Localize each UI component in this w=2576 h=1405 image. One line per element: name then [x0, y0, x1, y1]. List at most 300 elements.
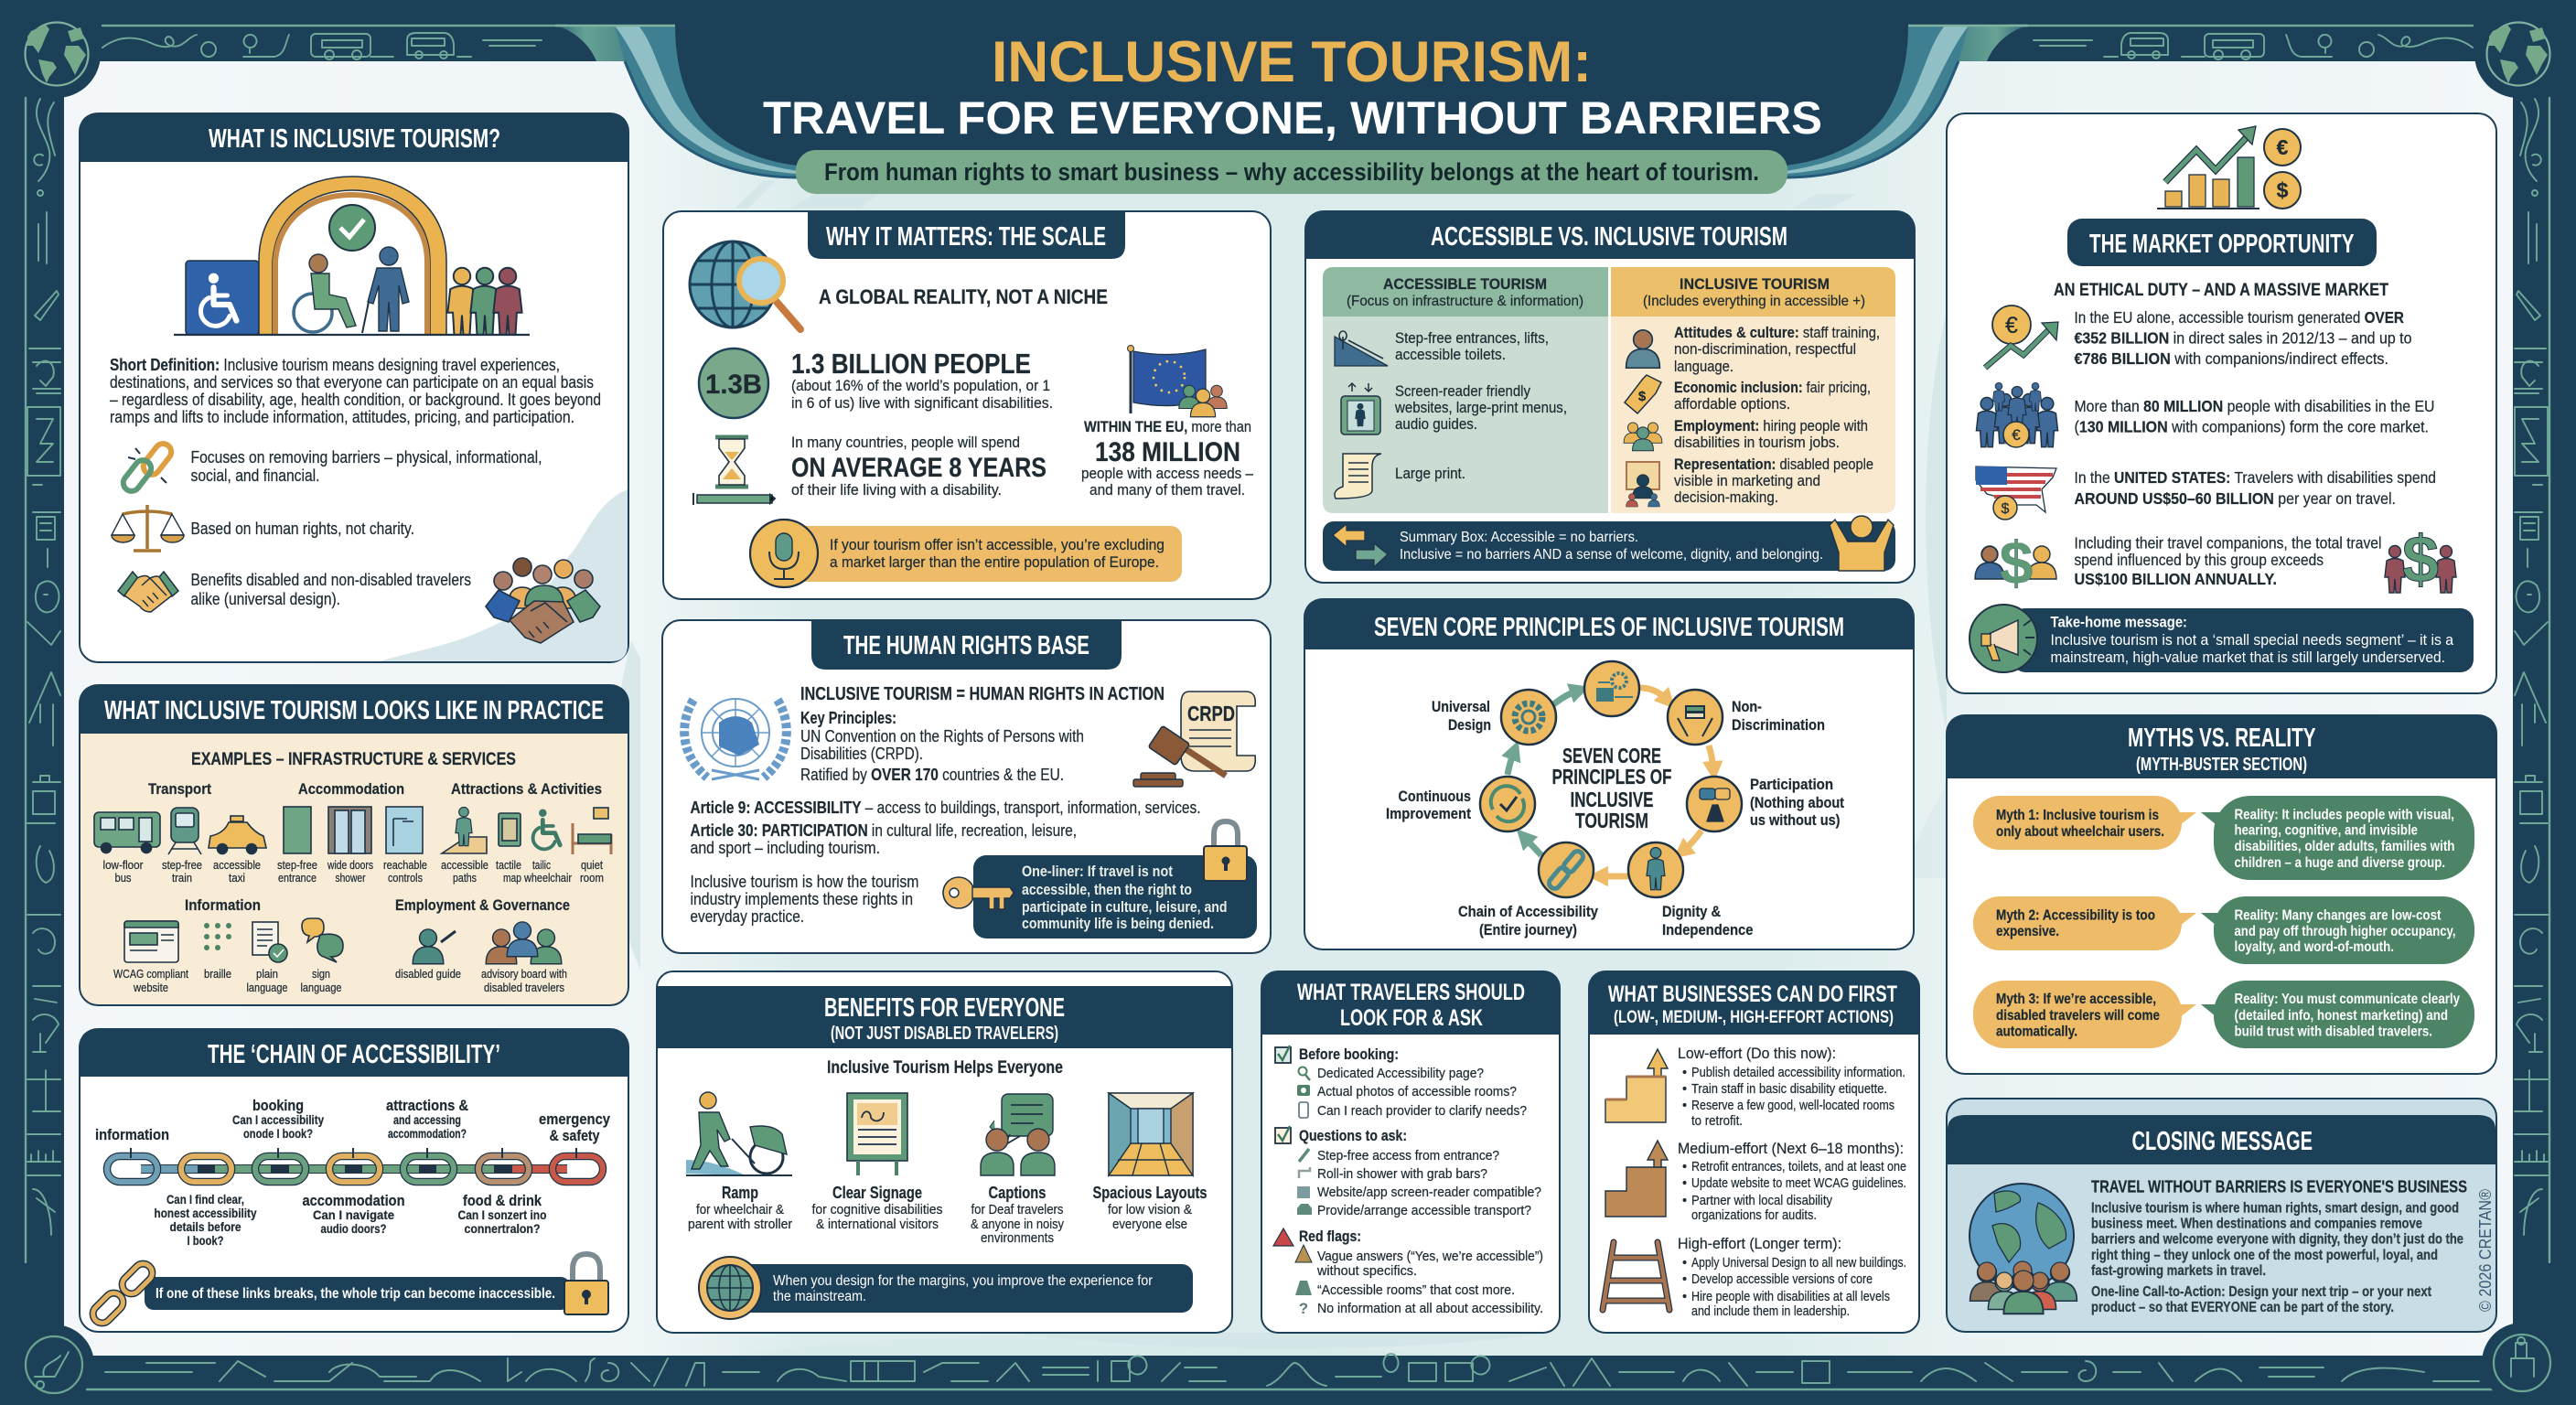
closing text: business meet. When destinations and companies remove [2091, 1217, 2422, 1231]
icon: chain [1547, 849, 1585, 891]
benefit labels: for cognitive disabilities [812, 1202, 942, 1217]
panel: accessible vs inclusive [1305, 211, 1915, 583]
icon: scales of justice [112, 505, 184, 551]
panel: looks like in practice [80, 685, 628, 1005]
column: inclusive tourism: (Includes everything in accessible +) [1643, 294, 1865, 309]
point: universal design: alike (universal design). [190, 590, 340, 608]
callout: excluded market [750, 520, 1182, 587]
panel heading tab: THE HUMAN RIGHTS BASE [843, 631, 1089, 660]
articles [690, 799, 1200, 857]
column: inclusive tourism: language. [1674, 358, 1733, 375]
point: removing barriers: Focuses on removing barriers – physical, informational, [190, 448, 542, 467]
chain labels above: accommodation? [388, 1126, 467, 1141]
checklist: questions to ask: Step-free access from entrance? [1317, 1148, 1499, 1164]
subheading: Inclusive Tourism Helps Everyone [827, 1058, 1063, 1078]
callout: design for margins: the mainstream. [773, 1289, 866, 1304]
checklist: red flags: ? [1299, 1300, 1308, 1317]
information and employment labels: sign [312, 968, 330, 981]
background swooshes [610, 180, 1947, 1356]
short definition [110, 356, 601, 426]
principle labels [1386, 698, 1844, 938]
icons: information [124, 918, 343, 962]
corner medallion: top right globe [2474, 10, 2562, 98]
myth bubbles [1973, 796, 2196, 1048]
chain labels above: onode I book? [243, 1126, 313, 1141]
principle labels: Universal [1432, 698, 1490, 715]
reality text: Reality: Many changes are low-cost [2234, 907, 2441, 924]
center label: SEVEN CORE [1562, 744, 1661, 767]
callout: excluded market: a market larger than the entire population of Europe. [830, 553, 1159, 571]
center label: TOURISM [1575, 809, 1648, 832]
key principles: Ratified by OVER 170 countries & the EU. [800, 766, 1064, 784]
short definition: Short Definition: Inclusive tourism means designing travel experiences, [110, 356, 560, 374]
benefit labels [688, 1184, 1208, 1246]
principle labels: Discrimination [1732, 716, 1825, 734]
reality text: and pay off through higher occupancy, [2234, 924, 2455, 939]
checklist: red flags: Red flags: [1299, 1228, 1361, 1245]
icon: ladder [1603, 1242, 1669, 1310]
panel heading [1948, 1115, 2496, 1164]
chain labels above: emergency [539, 1110, 610, 1128]
column: inclusive tourism: non-discrimination, respectful [1674, 340, 1856, 358]
transport and accommodation labels: controls [388, 872, 423, 885]
benefit labels: parent with stroller [688, 1217, 792, 1232]
myth text: Myth 2: Accessibility is too [1996, 907, 2155, 924]
icon: USA flag map [1976, 467, 2056, 520]
transport and accommodation labels: train [172, 872, 192, 885]
point: removing barriers [190, 448, 542, 485]
transport and accommodation labels: tactile [496, 859, 521, 872]
stat: eight years [791, 434, 1046, 499]
panel heading: WHAT BUSINESSES CAN DO FIRST [1608, 981, 1897, 1007]
reality text: Reality: It includes people with visual, [2234, 807, 2454, 823]
point: removing barriers: social, and financial. [190, 467, 320, 485]
stat: 138 million: and many of them travel. [1089, 481, 1245, 499]
transport and accommodation labels: shower [335, 872, 366, 885]
panel heading [1261, 971, 1560, 1035]
column: inclusive tourism [1611, 267, 1895, 513]
checklist: before booking: Dedicated Accessibility page? [1317, 1066, 1484, 1081]
closing text: TRAVEL WITHOUT BARRIERS IS EVERYONE'S BUSINESS [2091, 1178, 2467, 1196]
transport and accommodation labels: paths [453, 872, 477, 885]
arrows between principles [1508, 688, 1713, 876]
panel heading: LOOK FOR & ASK [1340, 1005, 1483, 1031]
stat: United States: In the UNITED STATES: Travelers with disabilities spend [2075, 468, 2436, 487]
reality bubbles [2201, 796, 2474, 1048]
low-effort actions: • [1682, 1082, 1687, 1097]
checklist: before booking [1275, 1046, 1527, 1119]
myth text: automatically. [1996, 1024, 2077, 1039]
title: TRAVEL FOR EVERYONE, WITHOUT BARRIERS [763, 92, 1822, 144]
panel heading tab [808, 211, 1125, 259]
chain labels above [95, 1097, 610, 1144]
chain labels below: Can I find clear, [166, 1192, 244, 1207]
stat: 138 million [1081, 418, 1253, 499]
column: inclusive tourism: Employment: hiring people with [1674, 417, 1868, 434]
icon: crowd with coin [1976, 382, 2058, 447]
stat: eight years: In many countries, people will spend [791, 434, 1020, 451]
reality text: disabilities, older adults, families with [2234, 839, 2455, 854]
callout: one-liner: One-liner: If travel is not [1022, 863, 1173, 880]
information and employment labels: braille [204, 968, 231, 981]
panel heading: CLOSING MESSAGE [2131, 1127, 2313, 1156]
icon: dollar with two people: $ [2402, 523, 2439, 596]
corner medallion: bottom left [14, 1325, 94, 1405]
icon: price tag: $ [1638, 389, 1647, 404]
icon: CRPD scroll and gavel [1133, 692, 1255, 787]
chain labels above: Can I accessibility [232, 1112, 324, 1127]
checklist: questions to ask: Questions to ask: [1299, 1127, 1407, 1144]
transport and accommodation labels: entrance [278, 872, 317, 885]
callout: one-liner: participate in culture, leisure, and [1022, 898, 1228, 916]
icons: transport [94, 808, 266, 854]
column: inclusive tourism: INCLUSIVE TOURISM [1680, 275, 1830, 293]
icon: employees [1624, 423, 1662, 451]
icon: speech bubbles [1700, 788, 1730, 821]
point: universal design: Benefits disabled and non-disabled travelers [190, 571, 471, 589]
transport and accommodation labels: step-free [277, 859, 317, 872]
icon: key [943, 877, 1014, 909]
benefit labels: Ramp [722, 1184, 758, 1202]
chain labels above: and accessing [393, 1112, 461, 1127]
category headings row two: Employment & Governance [395, 896, 570, 914]
principle labels: Chain of Accessibility [1458, 903, 1598, 920]
column: accessible tourism: ACCESSIBLE TOURISM [1383, 275, 1547, 293]
stat: travel companions: US$100 BILLION ANNUALLY. [2075, 570, 2277, 588]
stat: EU sales: In the EU alone, accessible tourism generated OVER [2075, 308, 2404, 327]
summary box [1323, 516, 1895, 571]
stat: 1.3 billion: in 6 of us) live with significant disabilities. [791, 394, 1053, 412]
high-effort actions: High-effort (Longer term): [1678, 1235, 1841, 1252]
checklist: questions to ask [1275, 1126, 1541, 1218]
callout: take-home message: Inclusive tourism is not a ‘small special needs segment’ – it is a [2051, 632, 2454, 649]
principle labels: Participation [1750, 776, 1833, 793]
chain labels below: Can I navigate [313, 1207, 394, 1222]
benefit labels: & international visitors [816, 1217, 939, 1232]
short definition: destinations, and services so that everyone can participate on an equal basis [110, 373, 594, 391]
chain labels above: booking [252, 1097, 304, 1114]
icon: staff member [1626, 330, 1659, 368]
checklist: before booking: Can I reach provider to clarify needs? [1317, 1103, 1527, 1119]
callout: take-home message: mainstream, high-value market that is still largely underserved. [2051, 649, 2445, 666]
icon: 1.3B badge: 1.3B [705, 370, 762, 400]
panel heading: (LOW-, MEDIUM-, HIGH-EFFORT ACTIONS) [1614, 1008, 1894, 1027]
chain labels below: details before [170, 1219, 242, 1234]
principle labels: Design [1448, 716, 1491, 734]
panel heading: WHAT IS INCLUSIVE TOURISM? [209, 124, 500, 154]
transport and accommodation labels: step-free [162, 859, 202, 872]
panel: why it matters [663, 211, 1271, 599]
information and employment labels: language [247, 981, 288, 994]
chain labels above: & safety [549, 1127, 600, 1144]
icon: hands holding [1678, 706, 1712, 736]
panel: seven core principles [1304, 599, 1914, 949]
icon: diverse group handshake [486, 558, 600, 643]
short definition: – regardless of disability, age, health condition, or background. It goes beyond [110, 391, 601, 409]
myth text: expensive. [1996, 924, 2059, 939]
column: accessible tourism: websites, large-print menus, [1394, 399, 1567, 416]
callout: take-home message: Take-home message: [2051, 615, 2187, 631]
information and employment labels: WCAG compliant [113, 968, 188, 981]
header banner [555, 0, 2028, 177]
key principles: INCLUSIVE TOURISM = HUMAN RIGHTS IN ACTION [800, 684, 1165, 704]
information and employment labels: language [300, 981, 342, 994]
chain labels below: audio doors? [320, 1221, 386, 1236]
subheading: A GLOBAL REALITY, NOT A NICHE [819, 285, 1108, 308]
icon: 1.3B badge [699, 349, 768, 418]
stat: eight years: ON AVERAGE 8 YEARS [791, 453, 1046, 483]
panel heading: MYTHS VS. REALITY [2128, 724, 2316, 753]
myth text: Myth 1: Inclusive tourism is [1996, 808, 2159, 823]
low-effort actions: Reserve a few good, well-located rooms [1691, 1099, 1894, 1113]
icon: growth chart with coins: $ [2277, 178, 2289, 202]
stat: 1.3 billion [791, 348, 1053, 412]
illustration: accessible arch [174, 177, 530, 335]
icon: captions and people [981, 1094, 1055, 1175]
column: inclusive tourism: Economic inclusion: fair pricing, [1674, 379, 1871, 396]
panel: market opportunity [1947, 113, 2496, 693]
chain labels below: I book? [187, 1233, 223, 1248]
low-effort actions [1678, 1045, 1905, 1129]
reality text: hearing, cognitive, and invisible [2234, 823, 2418, 838]
panel heading: WHAT TRAVELERS SHOULD [1297, 980, 1525, 1005]
subtitle pill [796, 150, 1787, 194]
short definition: ramps and lifts to include information, attitudes, pricing, and participation. [110, 408, 574, 426]
benefit labels: & anyone in noisy [971, 1217, 1064, 1232]
corner medallion: top left globe [13, 10, 101, 98]
icons: attractions [442, 807, 611, 854]
panel heading [80, 685, 628, 734]
panel heading: (MYTH-BUSTER SECTION) [2136, 755, 2307, 775]
panel heading pill [2067, 219, 2377, 266]
icon: dollar with two people [2385, 523, 2456, 596]
reality text: Reality: You must communicate clearly [2234, 992, 2460, 1007]
icon: continuous improvement [1491, 786, 1524, 821]
icon: large print scroll [1335, 454, 1381, 499]
information and employment labels: advisory board with [481, 968, 567, 981]
icon: signage board [847, 1093, 907, 1175]
key principles: Key Principles: [800, 709, 896, 727]
stat: EU population: More than 80 MILLION people with disabilities in the EU [2075, 397, 2435, 415]
closing text: barriers and welcome everyone with dignity, they don’t just do the [2091, 1231, 2463, 1248]
principle labels: Independence [1662, 921, 1753, 938]
transport and accommodation labels: accessible [213, 859, 261, 872]
center label: PRINCIPLES OF [1551, 765, 1672, 788]
column: accessible tourism: accessible toilets. [1395, 346, 1506, 363]
transport and accommodation labels: taxi [229, 872, 245, 885]
benefit labels: everyone else [1112, 1217, 1187, 1232]
benefit labels: for low vision & [1108, 1202, 1192, 1217]
icon: price tag [1625, 375, 1661, 413]
panel heading: ACCESSIBLE VS. INCLUSIVE TOURISM [1431, 222, 1787, 252]
checklist: questions to ask: Website/app screen-reader compatible? [1317, 1185, 1541, 1200]
myth text: Myth 3: If we’re accessible, [1996, 992, 2156, 1007]
high-effort actions: • [1682, 1272, 1687, 1287]
medium-effort actions: • [1682, 1194, 1687, 1208]
point: universal design [190, 571, 471, 608]
column: inclusive tourism: Representation: disabled people [1674, 456, 1873, 473]
medium-effort actions: Medium-effort (Next 6–18 months): [1678, 1140, 1904, 1157]
key principles: Disabilities (CRPD). [800, 745, 923, 763]
callout: excluded market: If your tourism offer isn’t accessible, you’re excluding [830, 536, 1165, 553]
panel heading [1304, 599, 1914, 649]
callout: design for margins: When you design for the margins, you improve the experience for [773, 1273, 1153, 1289]
icon: globe and magnifier [690, 241, 800, 329]
panel heading: SEVEN CORE PRINCIPLES OF INCLUSIVE TOURISM [1374, 613, 1844, 642]
transport and accommodation labels: wheelchair [523, 872, 572, 885]
chain labels below: food & drink [463, 1192, 542, 1209]
stat: eight years: of their life living with a disability. [791, 481, 1002, 499]
icon: standing person [1647, 847, 1665, 890]
icon: broken link [89, 1260, 156, 1327]
checklist: questions to ask: Roll-in shower with grab bars? [1317, 1166, 1487, 1182]
transport and accommodation labels: wide doors [327, 859, 373, 872]
medium-effort actions: Retrofit entrances, toilets, and at least one [1691, 1160, 1906, 1174]
implementation note: everyday practice. [690, 907, 804, 926]
callout: design for margins [699, 1257, 1193, 1319]
information and employment labels: disabled travelers [484, 981, 564, 994]
icon: growth chart with coins [2157, 126, 2301, 209]
chain labels above: information [95, 1126, 169, 1143]
chain labels below: Can I sonzert ino [457, 1207, 547, 1222]
high-effort actions: • [1682, 1290, 1687, 1304]
column: accessible tourism: audio guides. [1395, 415, 1477, 433]
panel: what businesses can do first [1589, 971, 1919, 1333]
benefit labels: Captions [988, 1184, 1046, 1202]
icon: accessible design [1597, 673, 1633, 701]
stat: 138 million: WITHIN THE EU, more than [1084, 418, 1251, 435]
category headings row one [148, 780, 602, 798]
panel heading tab [811, 620, 1122, 670]
category headings row one: Accommodation [298, 780, 404, 798]
icon: CRPD scroll and gavel: CRPD [1187, 702, 1235, 725]
icon: crowd with coin: € [2012, 426, 2021, 444]
low-effort actions: Train staff in basic disability etiquette. [1691, 1082, 1887, 1097]
subtitle pill: From human rights to smart business – why accessibility belongs at the heart of tourism. [824, 158, 1759, 186]
stat: 1.3 billion: (about 16% of the world’s population, or 1 [791, 377, 1050, 394]
transport and accommodation labels: bus [115, 872, 132, 885]
panel heading [1305, 211, 1915, 259]
closing text: product – so that EVERYONE can be part of the story. [2091, 1300, 2394, 1315]
low-effort actions: Publish detailed accessibility information. [1691, 1066, 1905, 1080]
panel: closing message [1947, 1099, 2496, 1332]
low-effort actions: Low-effort (Do this now): [1678, 1045, 1836, 1062]
icon: welcoming figure [1830, 516, 1894, 571]
implementation note: Inclusive tourism is how the tourism [690, 873, 918, 891]
stat: 1.3 billion: 1.3 BILLION PEOPLE [791, 348, 1031, 380]
high-effort actions: Hire people with disabilities at all levels [1691, 1290, 1890, 1304]
information and employment labels: website [133, 981, 168, 994]
icon: low-effort step [1605, 1049, 1668, 1122]
panel: what travelers should look for [1261, 971, 1560, 1333]
principle labels: Continuous [1398, 788, 1471, 805]
icon: hourglass and ruler [693, 437, 775, 505]
icon: EU flag and people [1127, 346, 1227, 417]
chain labels below: accommodation [302, 1192, 404, 1209]
column: accessible tourism: Screen-reader friendly [1395, 382, 1530, 400]
callout: take-home message [1970, 605, 2474, 672]
column: accessible tourism: (Focus on infrastructure & information) [1347, 294, 1583, 309]
column: inclusive tourism: decision-making. [1674, 488, 1778, 506]
icon: open padlock [1204, 821, 1247, 881]
key principles: UN Convention on the Rights of Persons with [800, 727, 1084, 745]
icon: ramp [1335, 331, 1388, 366]
corner medallion: bottom right [2482, 1323, 2562, 1403]
icon: UN emblem [684, 699, 787, 779]
closing text: fast-growing markets in travel. [2091, 1263, 2266, 1279]
icon: euro coin with arrow [1985, 306, 2058, 368]
icon: USA flag map: $ [2002, 501, 2010, 517]
principle labels: Non- [1732, 698, 1762, 715]
medium-effort actions: Update website to meet WCAG guidelines. [1691, 1176, 1906, 1191]
panel: human rights base [662, 620, 1271, 953]
closing text: One-line Call-to-Action: Design your next trip – or your next [2091, 1284, 2432, 1300]
icon: growth chart with coins: € [2277, 135, 2289, 159]
column: accessible tourism: Step-free entrances, lifts, [1395, 329, 1549, 347]
title [763, 30, 1822, 144]
category headings row one: Transport [148, 780, 211, 798]
panel heading: WHAT INCLUSIVE TOURISM LOOKS LIKE IN PRACTICE [104, 696, 604, 725]
transport and accommodation labels: room [580, 872, 604, 885]
panel: myths vs reality [1947, 715, 2496, 1074]
stat: United States: AROUND US$50–60 BILLION per year on travel. [2075, 489, 2396, 508]
myth text: only about wheelchair users. [1996, 824, 2164, 840]
icons: employment [413, 922, 562, 964]
checklist: questions to ask: Provide/arrange accessible transport? [1317, 1203, 1531, 1218]
examples subheading: EXAMPLES – INFRASTRUCTURE & SERVICES [191, 750, 516, 769]
checklist: red flags [1273, 1228, 1543, 1317]
stat: EU population [2075, 397, 2435, 435]
principle labels: Improvement [1386, 805, 1471, 822]
icon: people and dollar: $ [2000, 529, 2033, 596]
panel heading [658, 986, 1231, 1048]
subheading: AN ETHICAL DUTY – AND A MASSIVE MARKET [2054, 281, 2388, 300]
benefit labels: environments [981, 1230, 1054, 1246]
implementation note: industry implements these rights in [690, 890, 913, 908]
icon: representation [1626, 462, 1659, 507]
callout: one-liner: accessible, then the right to [1022, 881, 1192, 898]
panel heading [80, 1029, 628, 1077]
center label [1551, 744, 1672, 832]
category headings row one: Attractions & Activities [451, 780, 602, 798]
icon: gear [1515, 703, 1542, 731]
medium-effort actions [1678, 1140, 1906, 1223]
chain labels below: connertralon? [465, 1221, 540, 1236]
chain links [107, 1148, 603, 1182]
panel: chain of accessibility [80, 1029, 628, 1332]
panel heading [1947, 715, 2496, 778]
stat: travel companions: Including their travel companions, the total travel [2075, 534, 2382, 552]
stat: EU sales: €352 BILLION in direct sales in 2012/13 – and up to [2075, 329, 2411, 348]
stat: 138 million: people with access needs – [1081, 465, 1253, 482]
reality text: children – a huge and diverse group. [2234, 855, 2445, 871]
column: accessible tourism: Large print. [1395, 465, 1465, 482]
panel heading [80, 113, 628, 162]
icon: padlock [564, 1254, 608, 1314]
chain labels below [154, 1192, 547, 1248]
panel heading: BENEFITS FOR EVERYONE [824, 993, 1065, 1023]
stat: 138 million: 138 MILLION [1095, 437, 1240, 467]
callout: broken chain message [89, 1254, 608, 1327]
stat: United States [2075, 468, 2436, 508]
stat: EU sales: €786 BILLION with companions/indirect effects. [2075, 349, 2388, 368]
principle labels: (Nothing about [1750, 794, 1844, 811]
panel: benefits for everyone [657, 971, 1232, 1333]
callout: one-liner: community life is being denied. [1022, 915, 1214, 932]
column: inclusive tourism: Attitudes & culture: staff training, [1674, 324, 1880, 341]
benefit labels: for wheelchair & [696, 1202, 784, 1217]
information and employment labels: disabled guide [395, 968, 461, 981]
